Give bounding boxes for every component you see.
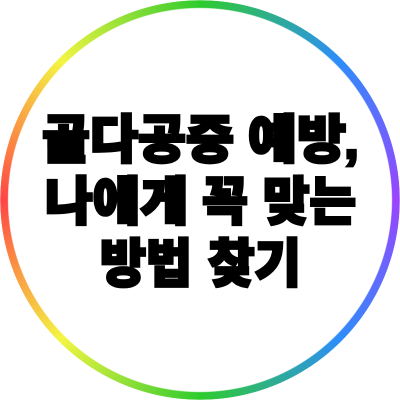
title line 1: , — [344, 112, 359, 170]
title line 3: 찾기 — [208, 236, 301, 294]
title line 1 — [42, 112, 359, 170]
title line 2: 나에게 — [45, 174, 188, 232]
title line 3 — [100, 236, 301, 294]
title line 2: 꼭 — [202, 174, 248, 232]
title line 1: 골다공증 — [42, 112, 234, 170]
title line 2 — [45, 174, 356, 232]
title line 2: 맞는 — [263, 174, 356, 232]
title line 1: 예방 — [248, 112, 346, 170]
title line 3: 방법 — [100, 236, 192, 294]
